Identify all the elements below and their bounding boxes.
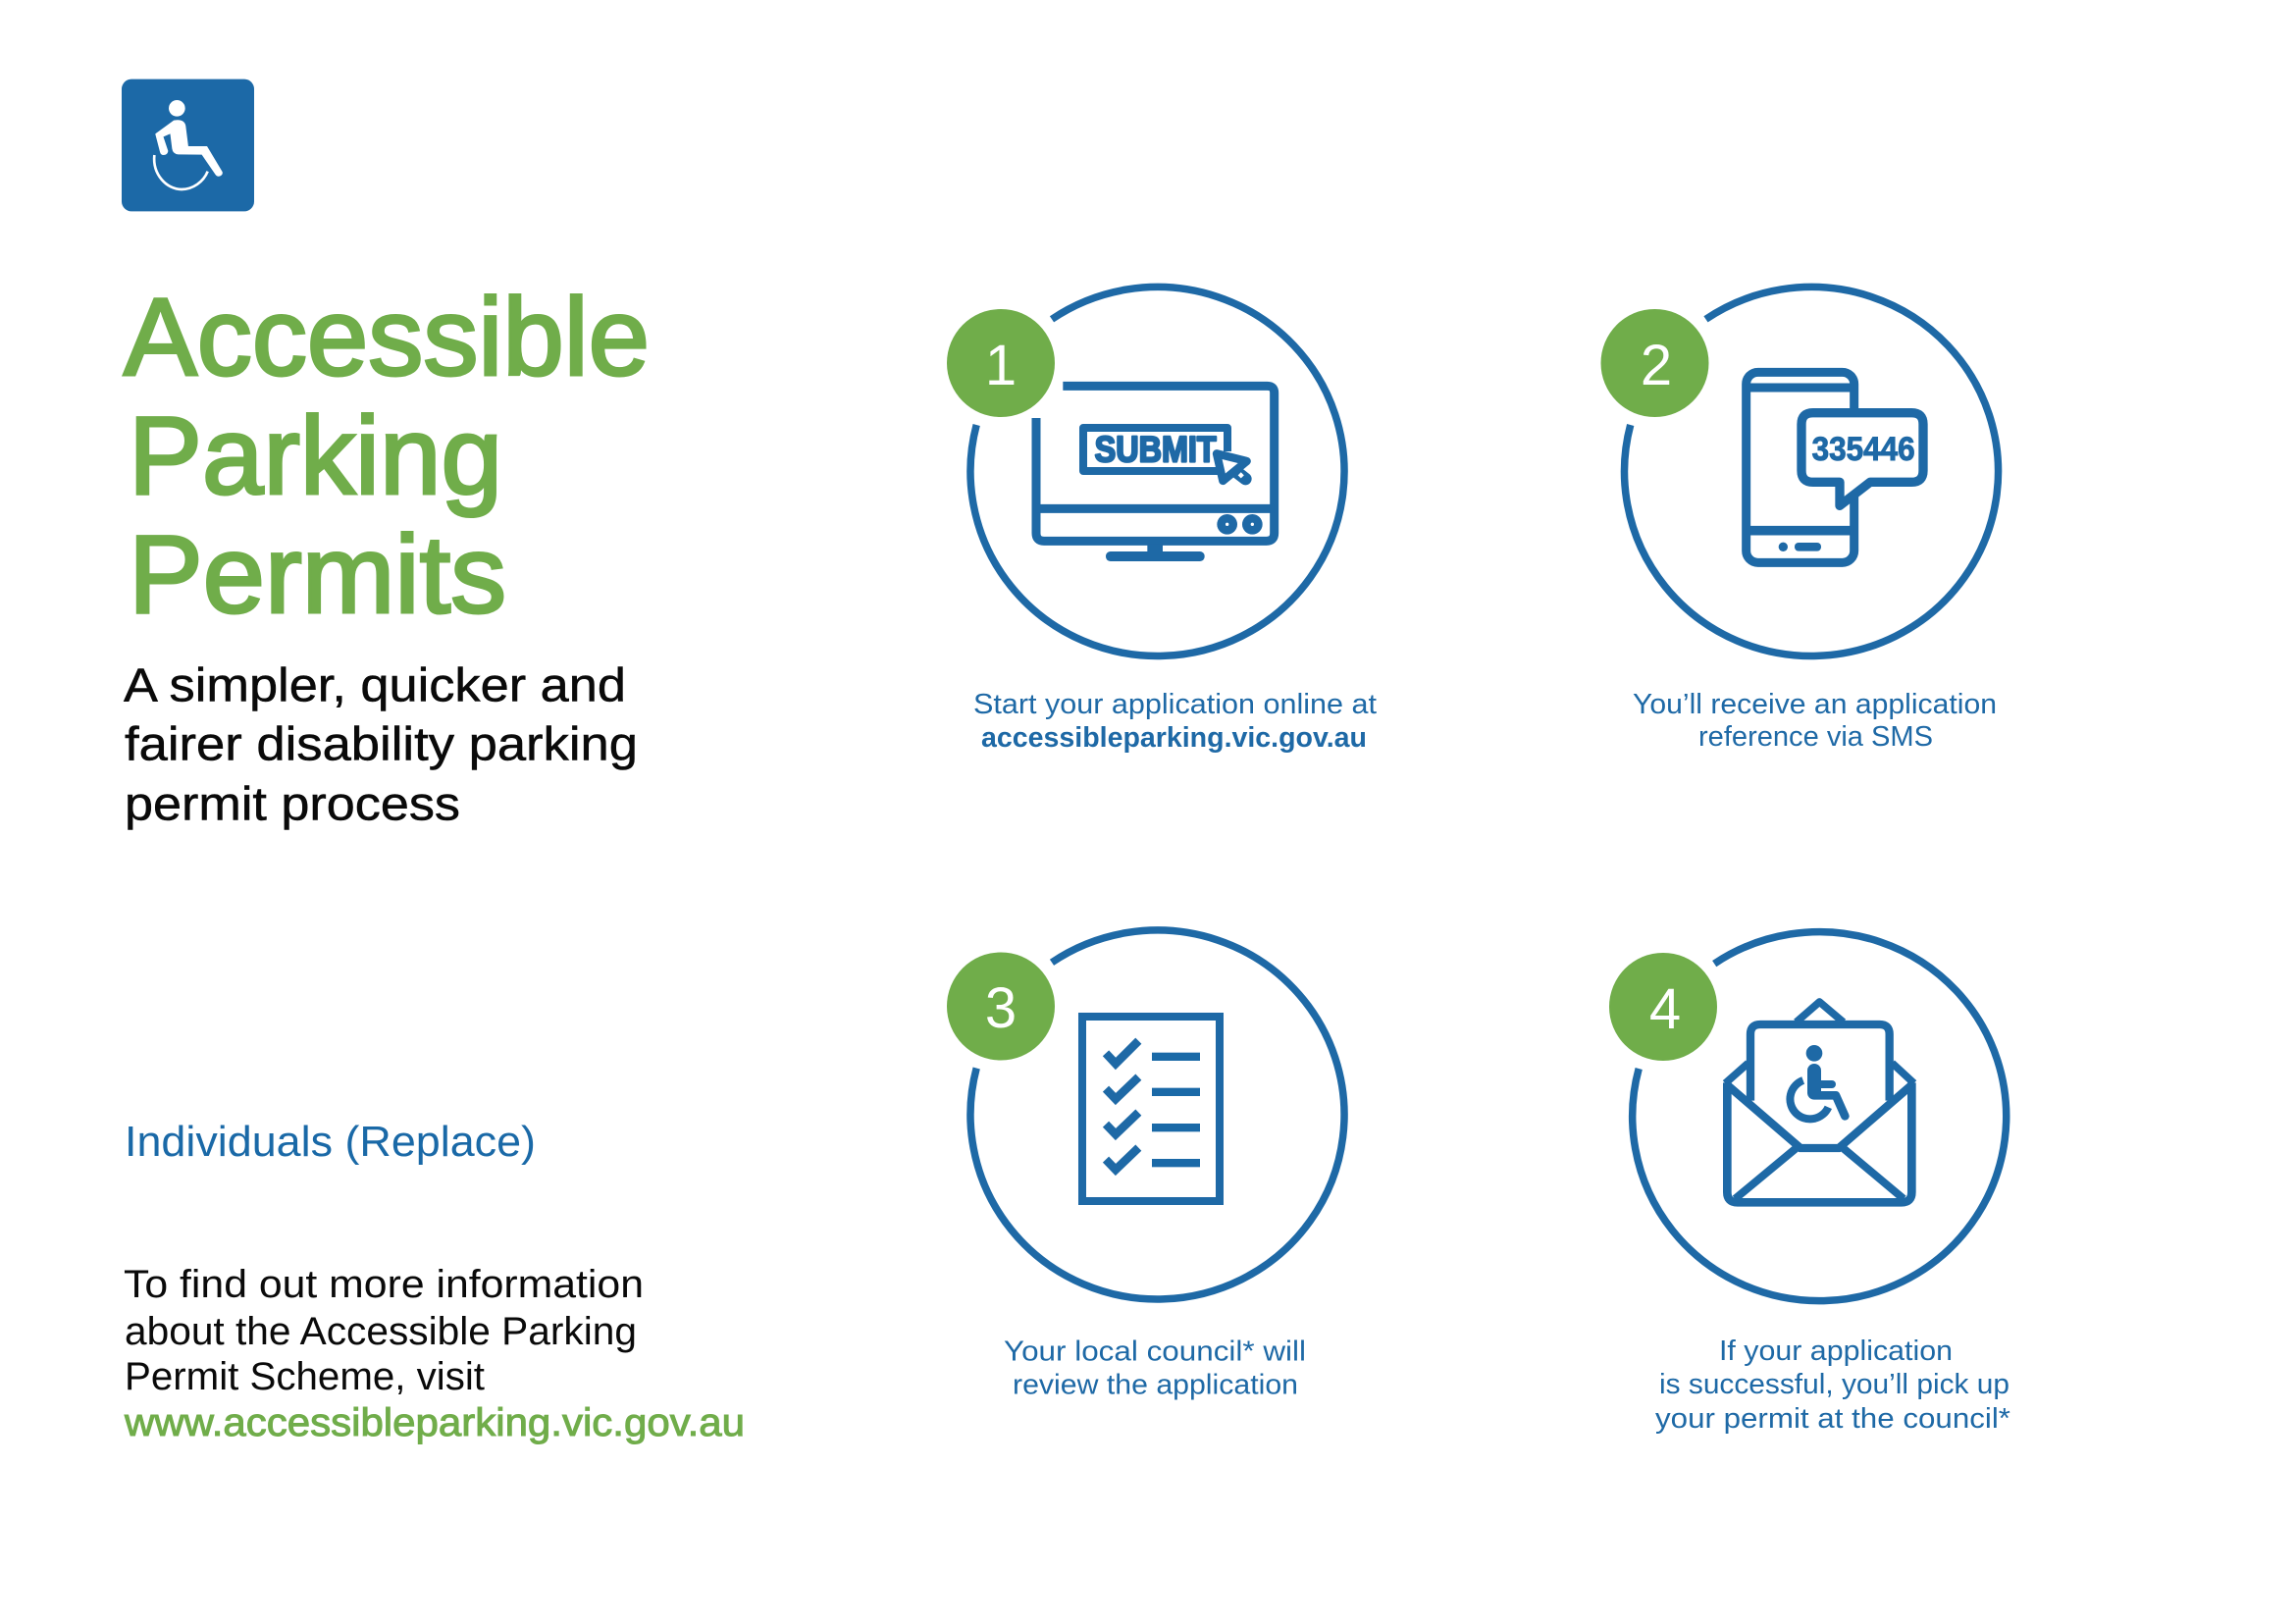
icon: accessible parking logo [122,79,254,211]
step 1 number badge [947,309,1055,417]
icon: phone with SMS bubble [1747,372,1923,562]
icon: checklist [1082,1017,1220,1201]
more information text [124,1263,745,1444]
step 2 [1601,287,1999,753]
step 3 caption [1004,1336,1306,1401]
step 2 number badge [1601,309,1709,417]
step 2 number badge: 2 [1641,334,1672,397]
step 2 caption: reference via SMS [1698,721,1933,753]
title [124,276,650,636]
more information text: Permit Scheme, visit [125,1355,485,1398]
subtitle [124,659,638,830]
step 1 [947,287,1377,754]
step 3 caption: Your local council* will [1004,1336,1306,1368]
audience label: Individuals (Replace) [125,1118,536,1166]
more information text: about the Accessible Parking [125,1310,637,1353]
subtitle: permit process [125,779,460,830]
icon: computer with submit button [1036,386,1275,561]
step 3 [947,930,1344,1401]
title: Accessible [124,276,650,398]
step 2 caption: You’ll receive an application [1633,689,1997,720]
step 4 caption [1655,1336,2010,1435]
step 4 caption: your permit at the council* [1655,1403,2010,1435]
subtitle: A simpler, quicker and [124,659,626,712]
step 2 ring [1625,287,1999,655]
step 1 caption: Start your application online at [973,689,1377,720]
step 1 caption: accessibleparking.vic.gov.au [981,722,1367,754]
step 4 ring [1633,932,2007,1301]
step 4 number badge: 4 [1649,977,1681,1041]
subtitle: fairer disability parking [125,718,638,771]
icon: open envelope with permit [1725,1002,1914,1202]
step 3 number badge [947,952,1055,1060]
title: Permits [129,513,506,636]
icon: computer with submit button: SUBMIT [1095,429,1217,470]
step 1 caption [973,689,1377,754]
step 1 number badge: 1 [985,334,1017,397]
step 4 [1609,932,2010,1435]
icon: phone with SMS bubble: 335446 [1812,431,1915,468]
title: Parking [129,394,502,517]
step 3 ring [970,930,1344,1299]
step 3 caption: review the application [1013,1370,1298,1401]
step 2 caption [1633,689,1997,753]
more information text: www.accessibleparking.vic.gov.au [124,1401,745,1444]
step 3 number badge: 3 [985,976,1017,1040]
step 1 ring [970,287,1344,655]
more information text: To find out more information [124,1263,644,1306]
step 4 caption: is successful, you’ll pick up [1659,1369,2009,1400]
step 4 number badge [1609,953,1717,1061]
step 4 caption: If your application [1719,1336,1953,1367]
